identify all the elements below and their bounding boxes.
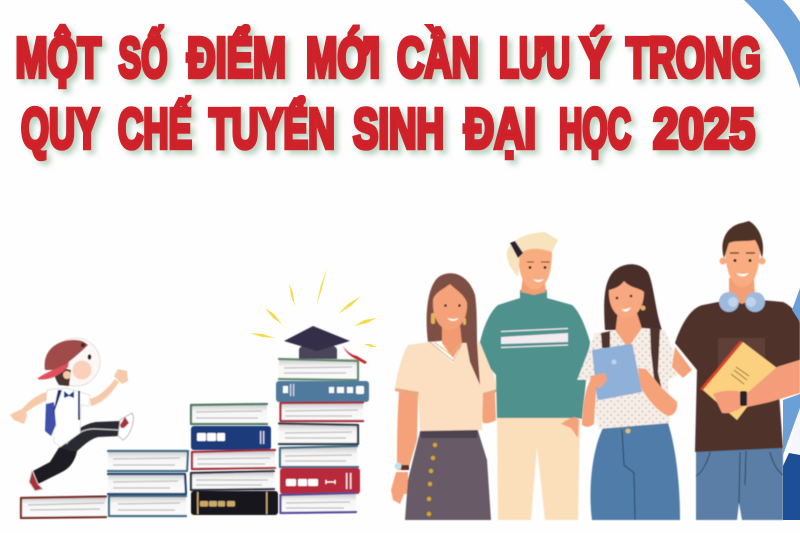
title line 1: Ý [580,25,610,89]
illustration: woman with tablet [577,264,682,520]
title line 1: ĐIỂM [187,25,286,89]
head [52,338,100,386]
backpack [45,402,56,436]
books: stack 3 [191,404,278,515]
title line 2 [21,96,755,160]
icon: graduation cap [284,326,367,364]
title line 2: CHẾ [118,96,192,160]
title line 1: LƯU [499,26,570,89]
jeans [590,423,680,520]
back leg [33,446,78,484]
arms [582,378,606,427]
title line 1 [16,25,761,89]
title line 2: QUY [21,97,99,160]
books: stack 4 [276,359,369,513]
blond hair [507,232,558,277]
head [521,275,546,295]
title line 2: SINH [353,97,444,160]
face [433,284,467,330]
front leg [60,421,120,452]
hair lock over shirt [466,340,480,385]
books: stack 2 [108,451,188,516]
title [16,25,761,160]
pants [497,417,580,520]
dotted blouse [577,328,682,429]
wristwatch [401,465,409,470]
icon: yellow sparkle rays [250,268,377,347]
tablet [592,344,642,400]
title line 1: MỘT [16,25,101,89]
title line 2: 2025 [653,97,755,160]
title line 1: SỐ [118,25,168,89]
skirt [405,431,491,520]
title line 1: CẦN [397,25,479,89]
title line 2: TUYỂN [209,96,335,160]
neck and head [729,278,755,304]
neck [442,325,462,358]
jeans [696,446,783,520]
illustration: woman with beige top [391,273,497,520]
book [700,341,743,391]
title line 2: ĐẠI [464,97,536,160]
shoe [118,413,133,440]
title line 2: HỌC [559,97,631,160]
headphones [719,292,739,312]
illustration: man in teal sweater [480,232,590,520]
cap [45,340,88,370]
hair [427,273,480,383]
left arm [397,392,418,470]
brown shirt [675,300,800,452]
sweater [480,290,590,419]
title line 1: MỚI [306,26,380,89]
illustration: running boy [10,338,133,491]
shirt [395,342,497,433]
backpack straps [601,327,662,390]
books: stack 1 [21,496,106,518]
hand on tablet [590,373,607,388]
decorative blue arc top right [744,0,800,88]
left arm [672,347,692,378]
decorative blue shapes right edge [783,288,800,520]
face and neck [615,310,644,350]
hand in pocket [561,417,579,438]
forearm and hand [747,360,800,407]
skirt buttons [427,443,437,516]
hair [722,221,763,258]
hair [604,264,662,330]
illustration: man in brown t-shirt with book [672,221,800,520]
white shirt [46,388,90,447]
arms [22,392,48,413]
right forearm [478,392,496,423]
wristwatch [740,391,747,406]
